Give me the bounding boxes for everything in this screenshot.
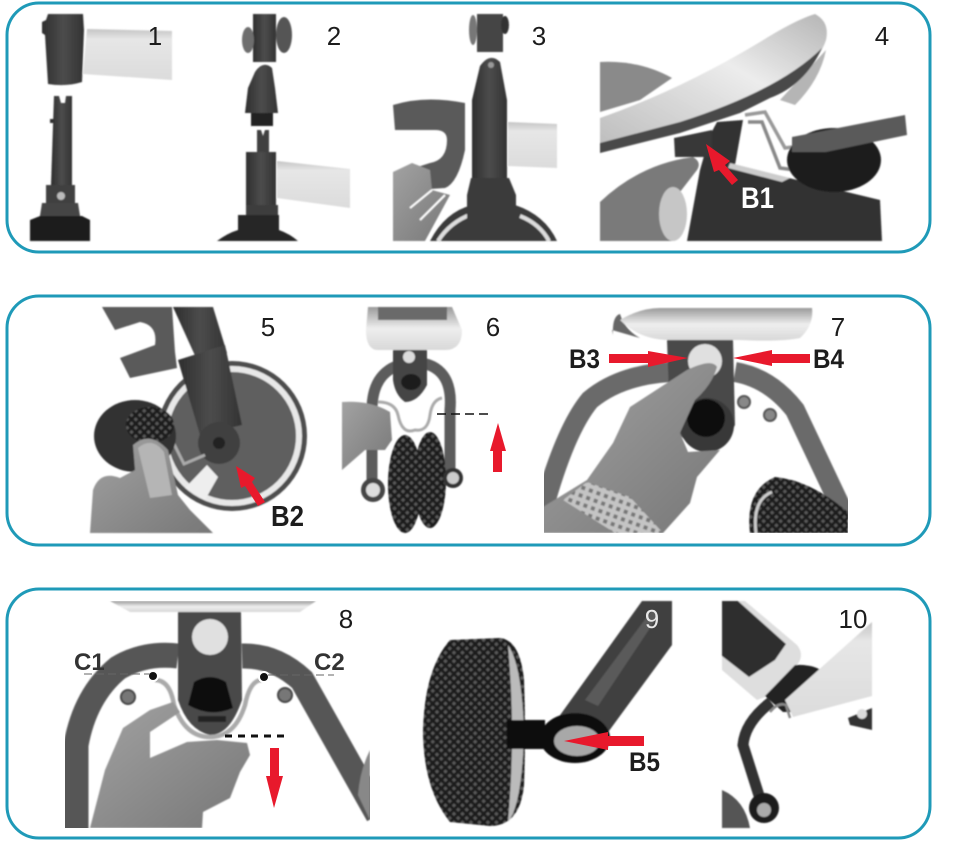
label C1: C1 — [74, 649, 105, 676]
arrow: up — [490, 423, 506, 472]
step number 2: 2 — [327, 21, 341, 51]
photo: step 1 tube and socket — [30, 14, 172, 241]
arrow: B5 — [564, 732, 644, 750]
step number 1: 1 — [148, 21, 162, 51]
dashed guide C1 — [84, 673, 150, 675]
label B3: B3 — [569, 344, 600, 374]
pin C1 — [148, 671, 158, 681]
photo: step 5 wheel removal — [90, 307, 307, 533]
step number 4: 4 — [875, 21, 889, 51]
photo: step 4 seat release — [600, 14, 907, 241]
photo: step 7 button press — [543, 308, 848, 533]
photo: step 8 latch pull — [76, 601, 378, 835]
dashed guide line step 6 — [437, 413, 492, 415]
step number 10: 10 — [839, 604, 867, 634]
step number 6: 6 — [486, 312, 500, 342]
pin C2 — [259, 672, 269, 682]
step number 5: 5 — [261, 312, 275, 342]
arrow: B4 — [733, 350, 810, 366]
label C2: C2 — [314, 649, 345, 676]
label B4: B4 — [813, 344, 844, 374]
photo: step 10 folded frame — [722, 601, 872, 828]
step number 7: 7 — [831, 312, 845, 342]
label B5: B5 — [629, 747, 660, 777]
photo: step 6 folded wheel lift — [342, 307, 463, 533]
photo: step 2 tube connector — [217, 14, 350, 241]
arrow: down — [266, 748, 283, 808]
panel: steps 5 to 7 — [7, 296, 930, 545]
step number 8: 8 — [339, 604, 353, 634]
dashed guide C2 — [268, 674, 334, 676]
arrow: B1 — [706, 144, 738, 185]
arrow: B3 — [609, 351, 688, 367]
photo: step 3 cup holder and column — [393, 14, 557, 241]
label B2: B2 — [271, 501, 304, 533]
arrow: B2 — [236, 466, 265, 506]
panel: steps 1 to 4 — [7, 3, 930, 252]
label B1: B1 — [741, 182, 774, 215]
step number 3: 3 — [532, 21, 546, 51]
panel: steps 8 to 10 — [7, 589, 930, 838]
photo: step 9 rear wheel — [423, 601, 672, 826]
dashed guide step 8 — [225, 734, 288, 738]
step number 9: 9 — [645, 604, 659, 634]
